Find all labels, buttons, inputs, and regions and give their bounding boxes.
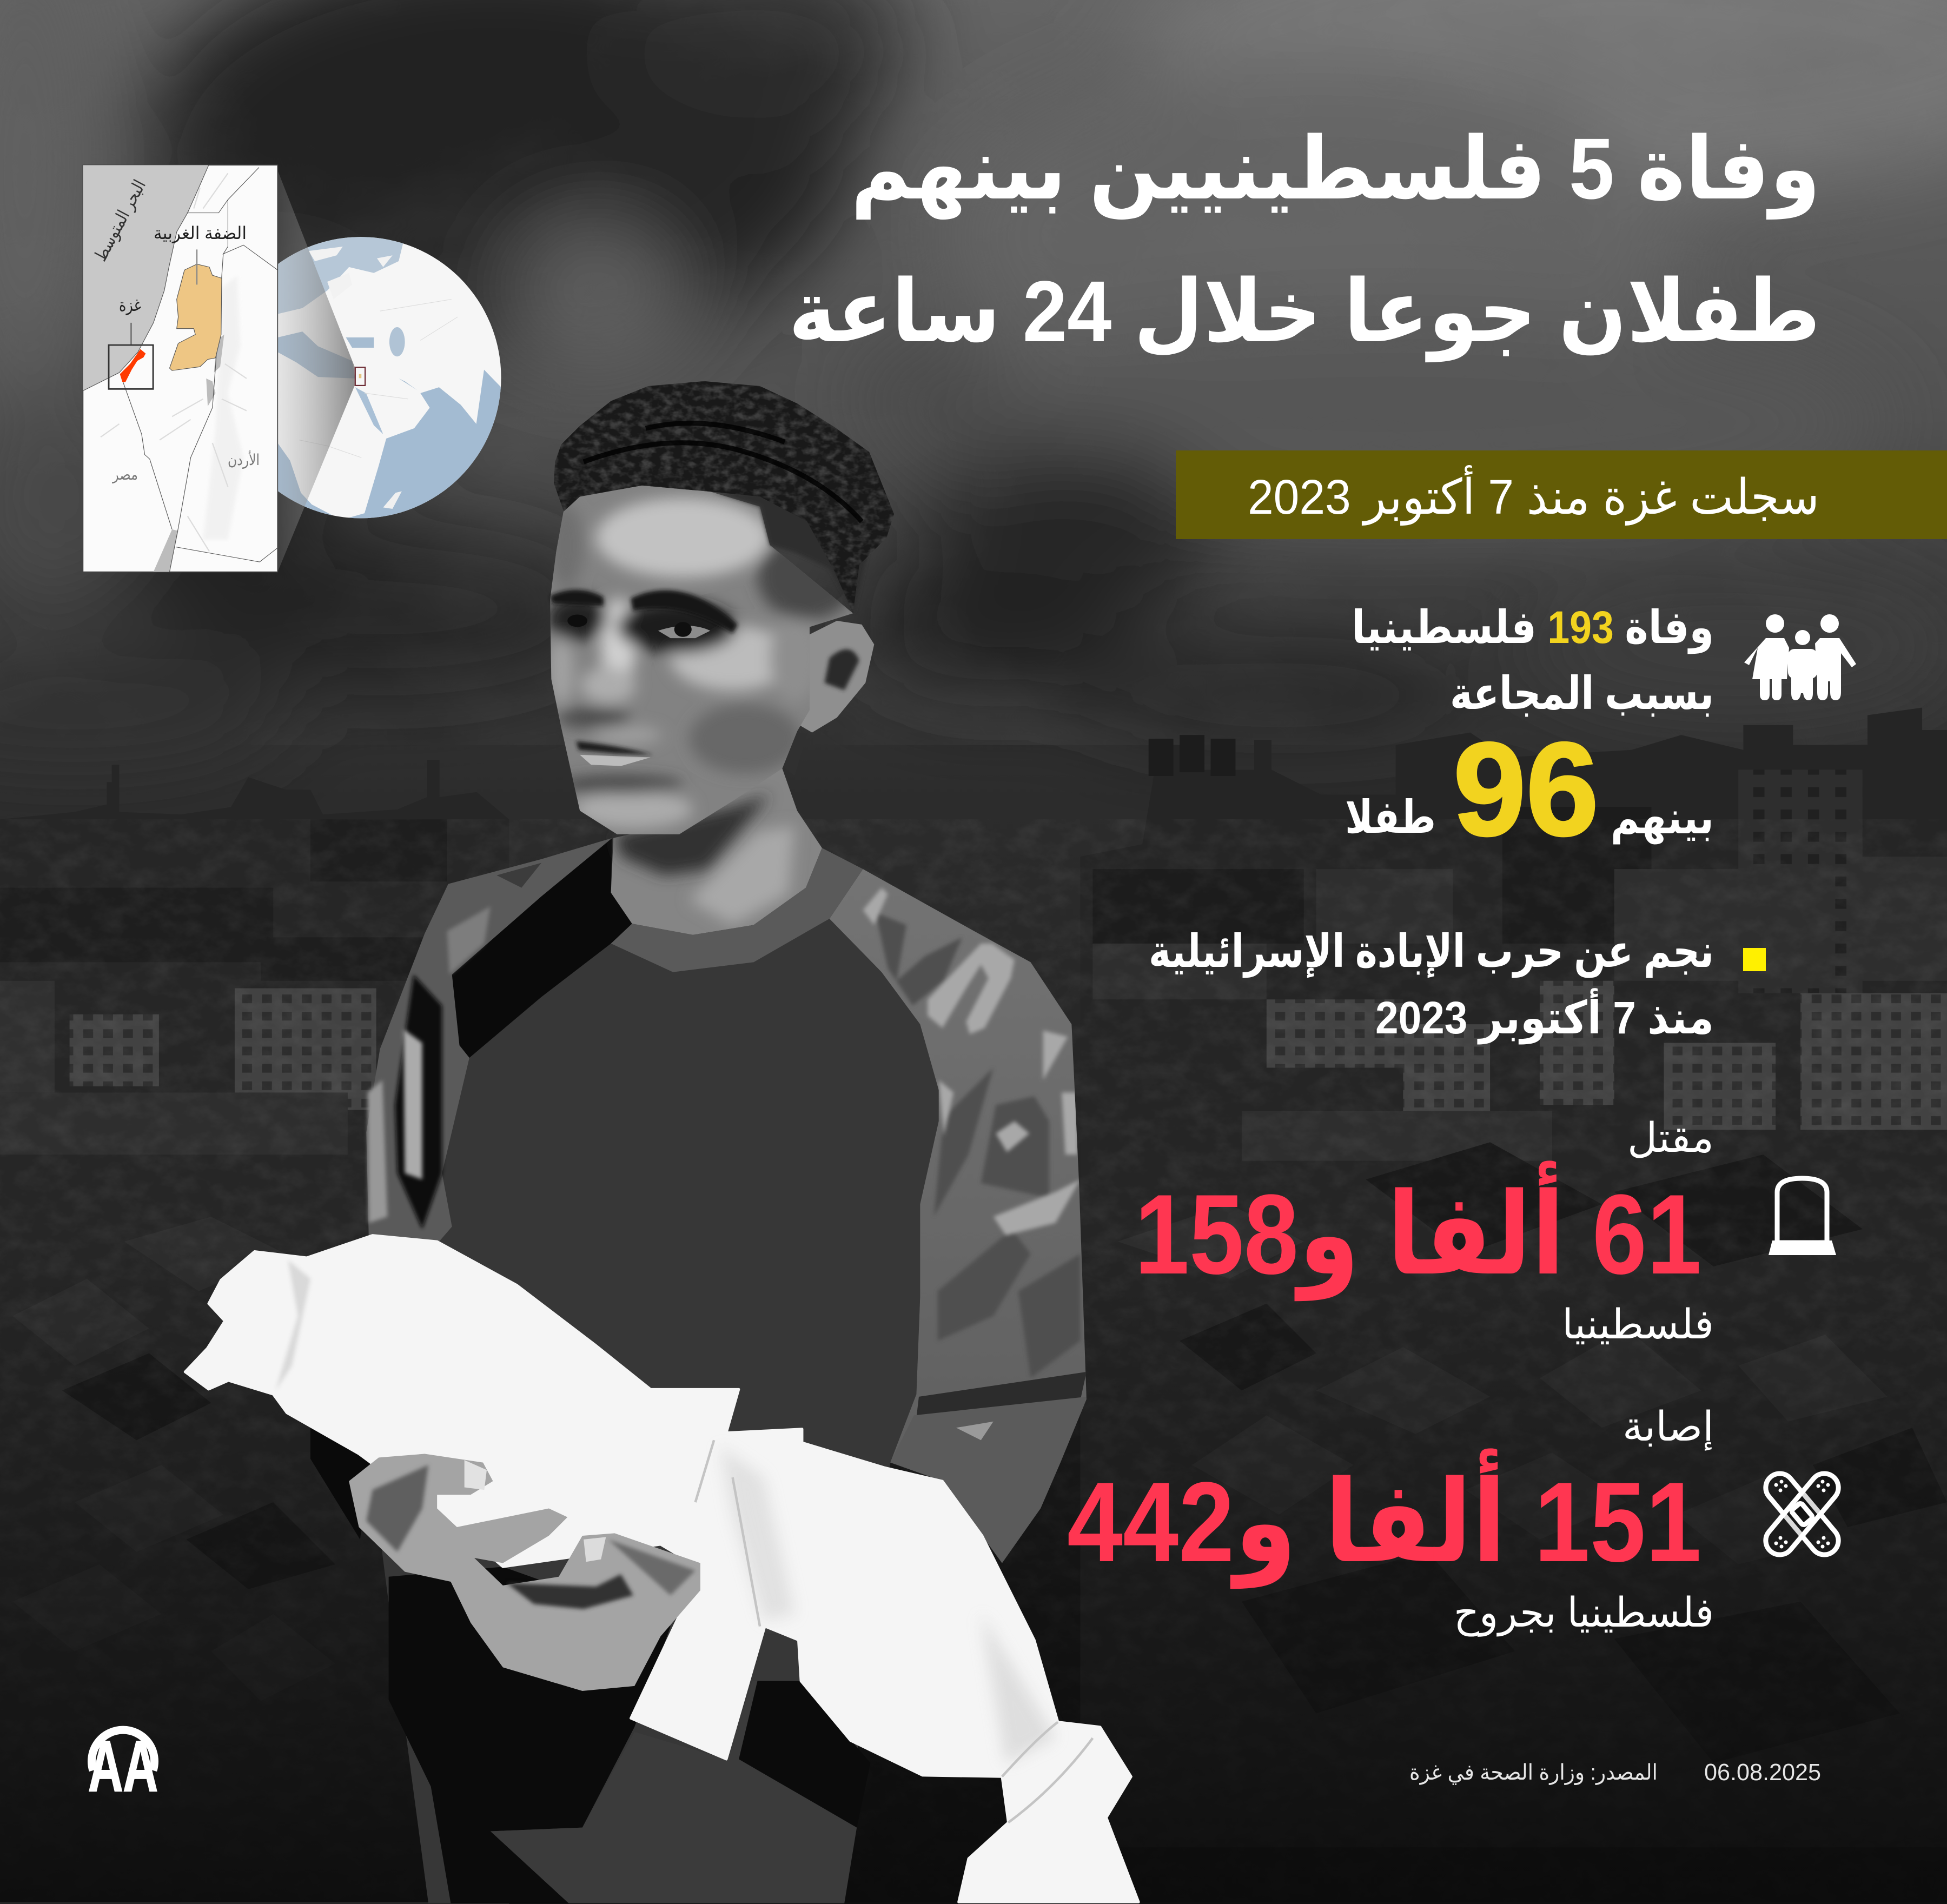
key fact: 193 starvation deaths and 96 children: وفاة 193 فلسطينيا xyxy=(1352,602,1714,654)
bullet square xyxy=(1743,948,1766,971)
sea xyxy=(83,165,209,391)
neck xyxy=(611,768,822,935)
source line: المصدر: وزارة الصحة في غزة xyxy=(1409,1761,1658,1785)
key fact: 193 starvation deaths and 96 children: طفلا xyxy=(1345,792,1436,842)
key fact: 193 starvation deaths and 96 children: بسبب المجاعة xyxy=(1450,668,1714,719)
title: وفاة 5 فلسطينيين بينهم xyxy=(851,120,1820,220)
eyes xyxy=(658,626,710,638)
text: result of the war: منذ 7 أكتوبر 2023 xyxy=(1375,988,1714,1045)
right sleeve camouflage xyxy=(830,869,1087,1563)
stat: killed xyxy=(1135,1115,1714,1348)
white shroud around the child xyxy=(185,1235,1138,1902)
key fact: 193 starvation deaths and 96 children: بينهم xyxy=(1611,792,1714,845)
lower dark shadow and trousers xyxy=(389,1567,671,1903)
connector wedge xyxy=(277,170,355,572)
stat: injured: 151 ألفا و442 xyxy=(1067,1448,1701,1589)
logo: Anadolu Agency xyxy=(88,1727,158,1807)
hair back shadow xyxy=(782,733,807,776)
key fact: 193 starvation deaths and 96 children: 96 xyxy=(1453,715,1599,863)
locator rectangle xyxy=(355,367,365,386)
subtitle band: سجلت غزة منذ 7 أكتوبر 2023 xyxy=(1248,465,1819,526)
tents xyxy=(12,1204,1888,1701)
face xyxy=(534,472,869,857)
icon: family xyxy=(1744,614,1856,700)
globe xyxy=(209,170,520,572)
locator map with globe xyxy=(83,165,520,572)
subtitle band xyxy=(1176,450,1947,539)
eyebrows xyxy=(550,590,738,633)
key fact: 193 starvation deaths and 96 children xyxy=(1345,602,1714,863)
map label: West Bank: الضفة الغربية xyxy=(154,223,247,243)
Gaza Strip xyxy=(120,349,145,382)
stat: killed: 61 ألفا و158 xyxy=(1135,1160,1701,1302)
title xyxy=(789,120,1820,362)
stat: injured: إصابة xyxy=(1623,1404,1714,1451)
icon: tombstone xyxy=(1769,1178,1836,1255)
map label: Mediterranean: البحر المتوسط xyxy=(90,176,150,264)
text: result of the war: نجم عن حرب الإبادة الإسرائيلية xyxy=(1149,926,1714,978)
hands xyxy=(349,1454,700,1691)
map label: Jordan: الأردن xyxy=(228,450,260,469)
stat: killed: فلسطينيا xyxy=(1562,1302,1714,1348)
sweater collar xyxy=(611,848,863,972)
map label: Egypt: مصر xyxy=(111,466,138,483)
left sleeve camouflage xyxy=(366,838,612,1254)
black shoulder shadow xyxy=(452,838,636,1058)
stat: injured: فلسطينيا بجروح xyxy=(1454,1590,1714,1637)
stat: injured xyxy=(1067,1404,1714,1637)
torso xyxy=(373,919,939,1903)
lips xyxy=(580,755,651,766)
Dead Sea and Red Sea gulf xyxy=(154,335,224,572)
title: طفلان جوعا خلال 24 ساعة xyxy=(789,263,1820,362)
skyline left xyxy=(0,760,509,1904)
faded hair xyxy=(714,492,869,613)
icon: crossed bandages xyxy=(1760,1468,1844,1561)
borders xyxy=(122,168,277,572)
skyline right xyxy=(1080,708,1947,1847)
head xyxy=(534,373,906,857)
detail map panel xyxy=(83,165,277,572)
ear xyxy=(797,621,874,733)
stat: killed: مقتل xyxy=(1627,1115,1714,1161)
West Bank xyxy=(170,264,222,370)
map label: Gaza: غزة xyxy=(119,295,141,315)
lit buildings xyxy=(235,989,376,1110)
text: result of the war xyxy=(1149,926,1714,1045)
hand details xyxy=(366,1460,696,1609)
hair xyxy=(554,381,894,613)
date: 06.08.2025 xyxy=(1704,1759,1821,1786)
photo: young man carrying the shrouded child xyxy=(185,373,1138,1903)
logo: Anadolu Agency: AA xyxy=(88,1727,158,1807)
